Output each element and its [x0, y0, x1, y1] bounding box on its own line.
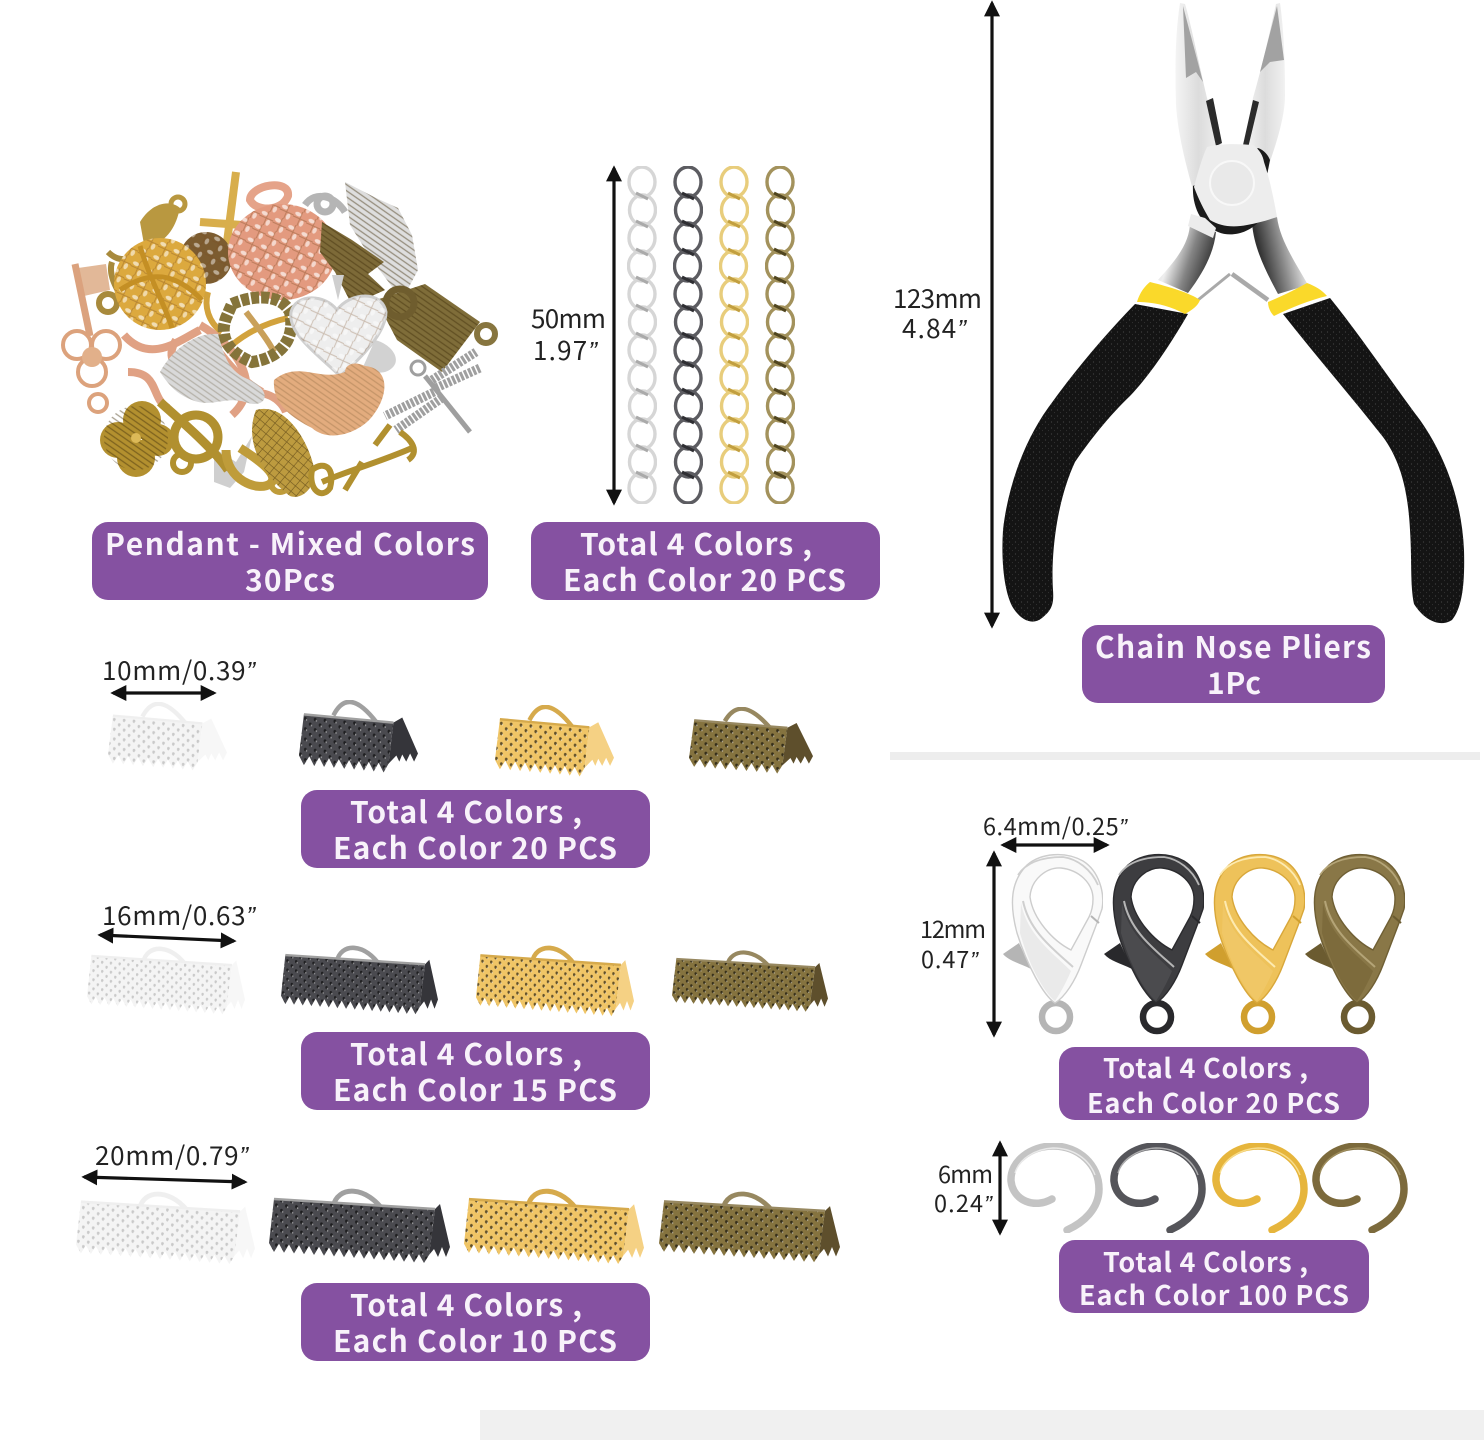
pendant: bronze bat: [320, 222, 385, 305]
badge: chains: Total 4 Colors ,: [580, 520, 812, 564]
jump rings: [1011, 1146, 1404, 1230]
label: clasp height: 0.47”: [921, 941, 979, 975]
badge: pliers: 1Pc: [1207, 659, 1261, 703]
chain extenders: [628, 167, 794, 503]
badge: 10mm: [301, 788, 650, 868]
label: 50mm: 1.97”: [533, 331, 598, 368]
pendant: silver backing: [355, 340, 396, 385]
label: 50mm: 50mm: [531, 299, 606, 336]
ribbon end: gold: [495, 707, 614, 776]
pendant: rose gold key: [63, 264, 120, 412]
chain: bronze: [766, 167, 794, 503]
arrow: 10mm width: [113, 691, 214, 695]
ribbon end: gold: [476, 948, 634, 1016]
pendant pile illustration: [63, 172, 495, 497]
ribbon end: black: [281, 948, 438, 1014]
badge: rings: Each Color 100 PCS: [1079, 1274, 1349, 1313]
clasp: gold: [1205, 855, 1305, 1031]
clasp: bronze: [1305, 855, 1405, 1031]
badge: clasps: [1059, 1047, 1369, 1121]
ribbon end: silver: [87, 949, 245, 1014]
label: clasp height: [920, 911, 986, 975]
pendant: bronze fan: [376, 284, 495, 372]
clasp: black: [1104, 855, 1204, 1031]
ribbon ends: 16mm row: [87, 896, 828, 1016]
label: ring size: 6mm: [938, 1156, 993, 1190]
pivot backing: [1193, 148, 1270, 234]
clasp: silver: [1003, 855, 1103, 1031]
badge: pendant: [92, 520, 488, 600]
ribbon ends: 10mm row: [102, 651, 813, 776]
badge: 20mm: Each Color 10 PCS: [333, 1317, 617, 1361]
jaw teeth shading: [1183, 6, 1284, 82]
arm collar: [1188, 214, 1216, 238]
badge: chains: [531, 520, 880, 600]
pendant: silver dragonfly: [385, 352, 480, 432]
pendant: silver star: [214, 436, 252, 488]
label: 10mm: 10mm/0.39”: [102, 651, 256, 688]
handle: right grip: [1283, 298, 1464, 623]
badge: pliers: Chain Nose Pliers: [1095, 623, 1371, 667]
arrow: chain length: [612, 168, 616, 503]
badge: rings: Total 4 Colors ,: [1103, 1241, 1308, 1280]
pendant: silver filigree heart: [291, 275, 386, 376]
badge: pendant: Pendant - Mixed Colors: [105, 520, 475, 564]
collar: right yellow: [1268, 283, 1327, 316]
pendant: gold mask: [226, 448, 289, 492]
badge: 10mm: Total 4 Colors ,: [350, 788, 582, 832]
pendant: gold filigree: [114, 197, 206, 330]
arm: left steel: [1158, 222, 1216, 293]
ring: gold: [1216, 1146, 1304, 1230]
ribbon end: gold: [464, 1191, 644, 1264]
badge: pliers: [1082, 623, 1385, 703]
label: 50mm: [531, 299, 606, 368]
divider: right column: [890, 752, 1480, 760]
arm: right steel: [1252, 217, 1308, 294]
pendant: antique gold lizard: [99, 248, 140, 312]
return spring: [1198, 274, 1268, 300]
badge: 20mm: Total 4 Colors ,: [350, 1281, 582, 1325]
pendant: gold treble clef: [160, 402, 228, 472]
pendant: bronze beaded ring: [224, 297, 291, 362]
badge: 16mm: [301, 1030, 650, 1110]
arrow: pliers height: [990, 3, 994, 626]
badge: pendant: 30Pcs: [245, 556, 335, 600]
pendant: rose filler pieces: [124, 250, 363, 415]
label: 123mm: [893, 279, 982, 346]
label: 123mm: 123mm: [893, 279, 982, 316]
ribbon end: bronze: [672, 952, 828, 1012]
pendant: silver horse: [160, 334, 265, 404]
ribbon end: black: [299, 702, 418, 772]
handle: left grip: [1002, 304, 1188, 622]
ribbon end: silver: [76, 1194, 255, 1264]
ring: silver: [1011, 1146, 1099, 1230]
pendant: gold fish: [252, 409, 314, 497]
badge: 10mm: Each Color 20 PCS: [333, 824, 617, 868]
pendant: rose filigree tree: [228, 185, 336, 300]
pendant: gold flower: [100, 401, 174, 477]
chain: gold: [720, 167, 748, 503]
label: 20mm: 20mm/0.79”: [95, 1136, 249, 1173]
jaw: right: [1245, 3, 1285, 176]
label: clasp height: 12mm: [920, 911, 986, 945]
label: ring size: 0.24”: [934, 1185, 993, 1219]
badge: 16mm: Total 4 Colors ,: [350, 1030, 582, 1074]
badge: 16mm: Each Color 15 PCS: [333, 1066, 617, 1110]
pendant: gold bow branch: [311, 425, 414, 493]
pendant: silver crown: [345, 182, 418, 300]
badge: 20mm: [301, 1281, 650, 1361]
chain: silver: [628, 167, 656, 503]
chain nose pliers: [1002, 3, 1464, 623]
pendant: rose gold butterfly: [274, 364, 384, 435]
arrow: ring size: [998, 1143, 1002, 1233]
badge: clasps: Total 4 Colors ,: [1103, 1047, 1308, 1086]
arrow: clasp height: [992, 853, 996, 1035]
bottom background band: [480, 1410, 1484, 1440]
pendant: silver ornament: [305, 196, 345, 212]
label: ring size: [934, 1156, 993, 1219]
ribbon ends: 20mm row: [76, 1136, 840, 1264]
arrow: 16mm width: [100, 935, 234, 941]
arrow: clasp width: [1003, 843, 1107, 847]
pivot plate: [1194, 144, 1277, 226]
grip texture: [1002, 298, 1464, 623]
label: 16mm: 16mm/0.63”: [102, 896, 256, 933]
jaw: left: [1175, 3, 1222, 200]
lobster clasps: [1003, 855, 1405, 1031]
ribbon end: bronze: [689, 709, 813, 774]
ring: bronze: [1316, 1146, 1404, 1230]
collar: left yellow: [1137, 282, 1200, 314]
ribbon end: black: [269, 1191, 450, 1263]
badge: chains: Each Color 20 PCS: [563, 556, 846, 600]
label: 123mm: 4.84”: [902, 309, 967, 346]
pendant: gold strands under ring: [207, 292, 288, 352]
badge: clasps: Each Color 20 PCS: [1087, 1082, 1340, 1121]
pendant: gold cross: [200, 172, 256, 250]
label: clasp width: 6.4mm/0.25”: [983, 808, 1128, 842]
ribbon end: silver: [108, 704, 227, 771]
pivot rivet: [1210, 161, 1254, 205]
jaw slots: [1206, 98, 1259, 148]
ribbon end: bronze: [659, 1194, 840, 1262]
pendant: brown flower: [180, 232, 232, 284]
arrow: 20mm width: [84, 1177, 245, 1182]
badge: rings: [1059, 1240, 1369, 1313]
chain: gunmetal: [674, 167, 702, 503]
ring: gunmetal: [1114, 1146, 1202, 1230]
